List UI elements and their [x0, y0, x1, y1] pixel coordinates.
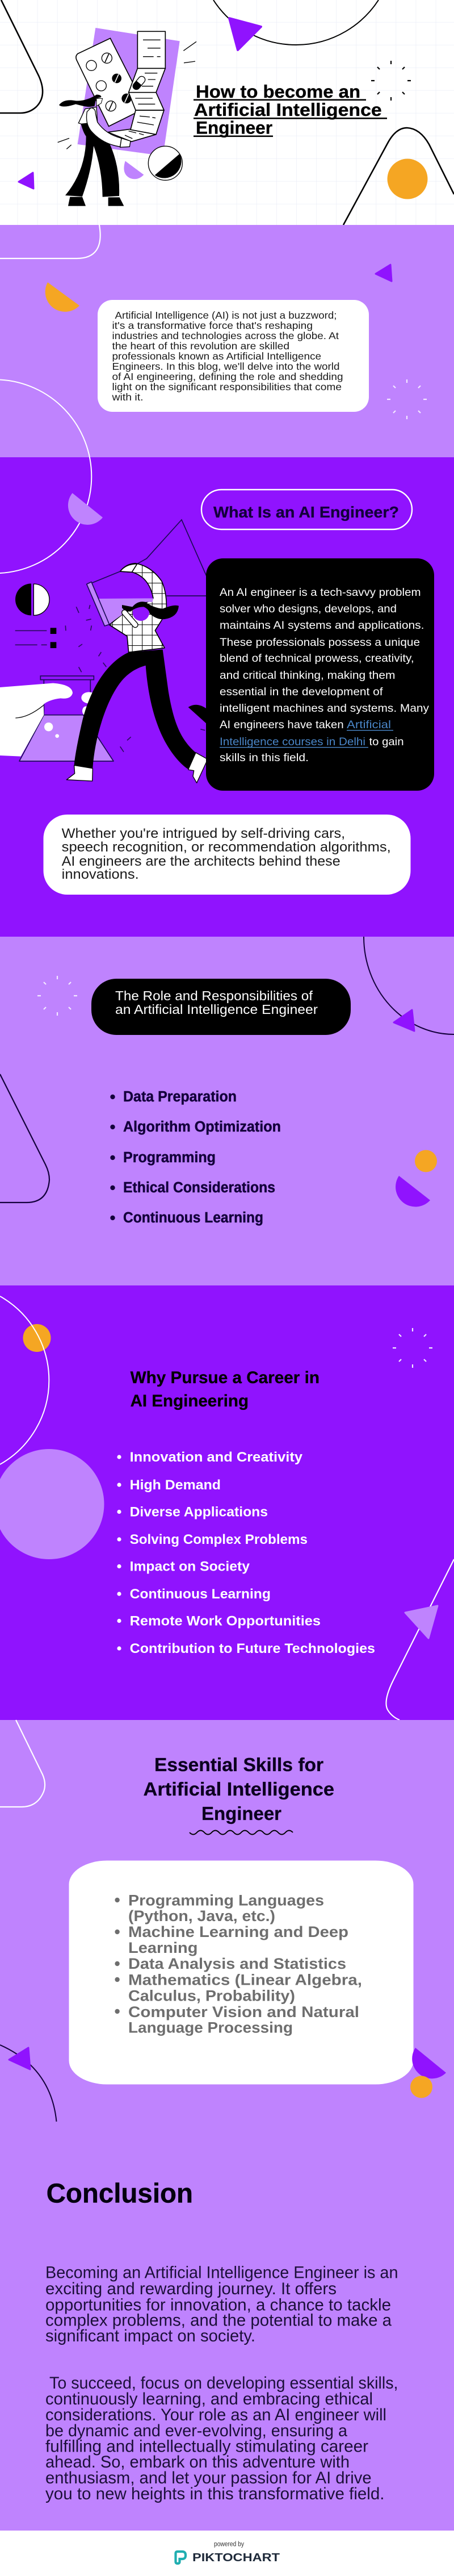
panel: introduction — [0, 225, 454, 457]
text block: black definition card: and critical thinking, making them — [220, 669, 395, 682]
icon: orange circle — [23, 1324, 51, 1352]
text block: paragraph one: opportunities for innovation, a chance to tackle — [45, 2296, 391, 2314]
list: responsibilities — [110, 1089, 281, 1226]
icon: purple triangle — [376, 265, 392, 281]
list: responsibilities: Continuous Learning — [123, 1210, 263, 1226]
list card: skills: Programming Languages — [128, 1892, 324, 1909]
outline: white rounded corner — [0, 225, 100, 258]
icon: purple triangle — [9, 2048, 30, 2069]
icon: small purple triangle — [19, 173, 33, 189]
text block: intro card: Artificial Intelligence (AI) is not just a buzzword; — [115, 310, 337, 321]
icon: purple half circle — [396, 1176, 430, 1206]
list: reasons: High Demand — [130, 1477, 221, 1493]
panel: why pursue a career — [0, 1285, 454, 1720]
text block: intro card: industries and technologies across the globe. At — [112, 330, 339, 341]
text block: white examples card: Whether you're intrigued by self-driving cars, — [62, 826, 345, 841]
icon: lilac circle — [0, 1449, 104, 1559]
list: reasons: Solving Complex Problems — [130, 1532, 308, 1547]
text block: paragraph one: complex problems, and the potential to make a — [45, 2311, 392, 2330]
list: reasons: Diverse Applications — [130, 1504, 268, 1520]
icon: orange circle — [410, 2076, 432, 2098]
icon: orange half circle — [45, 282, 79, 312]
icon: sunburst — [371, 61, 411, 101]
heading: Engineer — [201, 1803, 281, 1824]
list: reasons: Continuous Learning — [130, 1586, 271, 1602]
heading pill — [201, 490, 412, 529]
heading: Artificial Intelligence — [143, 1778, 334, 1800]
outline: white circle arc — [0, 1296, 49, 1464]
text block: black definition card: Intelligence courses in Delhi — [220, 736, 365, 748]
heading — [131, 1368, 320, 1410]
heading — [143, 1754, 334, 1824]
list card: skills: Machine Learning and Deep — [128, 1923, 348, 1940]
text block: paragraph two: continuously learning, and embracing ethical — [45, 2390, 373, 2408]
text block: paragraph two: ahead. So, embark on this adventure with — [45, 2453, 350, 2471]
outline: white circle arc — [0, 379, 91, 573]
icon: white sunburst — [37, 976, 77, 1016]
list card: skills: Language Processing — [128, 2019, 293, 2036]
outline: white rounded line — [386, 1559, 454, 1720]
text block: paragraph one — [45, 2263, 398, 2345]
outline: rounded mountain right — [343, 128, 454, 225]
heading: Conclusion — [47, 2179, 193, 2208]
outline: white rounded triangle — [0, 1720, 45, 1807]
list card: skills: Computer Vision and Natural — [128, 2003, 359, 2020]
outline: circle arc top — [213, 0, 379, 45]
text block: intro card: the heart of this revolution are skilled — [112, 340, 289, 352]
text block: black definition card: Artificial — [347, 719, 391, 731]
decorative wave underline — [190, 1830, 293, 1835]
text block: black definition card — [206, 558, 434, 791]
heading: AI Engineering — [131, 1392, 249, 1410]
panel: what is an AI engineer — [0, 379, 454, 937]
text block: paragraph one: exciting and rewarding journey. It offers — [45, 2279, 337, 2298]
outline: black arc bottom left — [0, 2045, 57, 2122]
list: responsibilities: Programming — [123, 1150, 216, 1166]
panel: essential skills — [0, 1720, 454, 2122]
list: reasons — [117, 1450, 375, 1656]
heading: Why Pursue a Career in — [131, 1368, 320, 1387]
text block: black definition card: blend of technical prowess, creativity, — [220, 652, 414, 665]
icon: orange circle — [387, 159, 428, 199]
list card: skills: Learning — [128, 1939, 197, 1956]
text block: white examples card: AI engineers are the architects behind these — [62, 854, 340, 869]
outline: rounded triangle left — [0, 1074, 49, 1203]
text block: paragraph two: enthusiasm, and let your passion for AI drive — [45, 2469, 372, 2487]
panel: role and responsibilities — [0, 937, 454, 1285]
icon: purple triangle — [394, 1010, 414, 1031]
text block: black definition card: These professionals possess a unique — [220, 636, 420, 649]
text block: black definition card: skills in this field. — [220, 751, 309, 764]
text block: black definition card: essential in the development of — [220, 686, 383, 698]
text block: intro card: professionals known as Artificial Intelligence — [112, 350, 321, 362]
panel: conclusion — [0, 2122, 454, 2531]
icon: purple triangle top — [229, 18, 261, 50]
title: Artificial Intelligence — [194, 99, 382, 120]
icon: white sunburst — [387, 379, 427, 419]
outline: black arc — [364, 937, 454, 1034]
list: reasons: Remote Work Opportunities — [130, 1613, 321, 1629]
icon: Piktochart logo — [176, 2552, 186, 2564]
text block: black definition card: An AI engineer is a tech-savvy problem — [220, 586, 421, 599]
text block: paragraph two — [45, 2374, 398, 2503]
text block: white examples card: speech recognition, or recommendation algorithms, — [62, 840, 391, 855]
text block: black definition card: solver who designs, develops, and — [220, 603, 397, 615]
text block: intro card — [98, 300, 369, 412]
list: responsibilities: Algorithm Optimization — [123, 1119, 281, 1135]
text block: paragraph two: fulfilling and intellectually stimulating career — [45, 2437, 368, 2456]
text block: intro card: with it. — [111, 391, 143, 403]
list: reasons: Contribution to Future Technologies — [130, 1641, 375, 1656]
list card: skills: Mathematics (Linear Algebra, — [128, 1971, 362, 1988]
text block: intro card: it's a transformative force that's reshaping — [112, 320, 313, 331]
outline: rounded triangle left — [0, 0, 43, 113]
text block: intro card: of AI engineering, defining the role and shedding — [112, 371, 343, 382]
icon: white sunburst — [393, 1328, 432, 1368]
list card: skills: (Python, Java, etc.) — [128, 1907, 275, 1924]
text block: paragraph two: considerations. Your role as an AI engineer will — [45, 2406, 386, 2424]
text block: black definition card: to gain — [369, 736, 404, 748]
heading pill: an Artificial Intelligence Engineer — [115, 1002, 318, 1017]
list: reasons: Impact on Society — [130, 1559, 250, 1575]
panel: header — [0, 0, 454, 225]
list: responsibilities: Ethical Considerations — [123, 1180, 275, 1196]
title: How to become an — [196, 81, 360, 102]
title — [194, 81, 387, 137]
text block: intro card: light on the significant responsibilities that come — [112, 381, 342, 393]
icon: lilac half circle — [68, 493, 103, 525]
footer: powered by Piktochart: PIKTOCHART — [192, 2552, 280, 2564]
heading pill — [91, 979, 351, 1035]
text block: paragraph one: Becoming an Artificial Intelligence Engineer is an — [45, 2263, 398, 2282]
list card: skills: Data Analysis and Statistics — [128, 1955, 346, 1972]
text block: white examples card: innovations. — [62, 867, 139, 882]
icon: orange circle — [415, 1150, 437, 1172]
icon: lilac triangle — [405, 1606, 438, 1638]
text block: white examples card — [43, 815, 411, 895]
text block: black definition card: intelligent machines and systems. Many — [220, 702, 429, 715]
icon: purple half circle — [412, 2048, 446, 2078]
text block: paragraph two: To succeed, focus on developing essential skills, — [49, 2374, 398, 2393]
list card: skills — [69, 1861, 413, 2085]
heading pill: The Role and Responsibilities of — [115, 988, 313, 1003]
text block: black definition card: maintains AI systems and applications. — [220, 619, 424, 632]
list card: skills: Calculus, Probability) — [128, 1988, 295, 2005]
footer: powered by Piktochart: powered by — [214, 2541, 244, 2548]
list: responsibilities: Data Preparation — [123, 1089, 237, 1105]
text block: paragraph one: significant impact on society. — [45, 2327, 255, 2345]
heading pill: What Is an AI Engineer? — [213, 503, 399, 521]
footer: powered by Piktochart — [0, 2531, 454, 2576]
text block: black definition card: AI engineers have taken — [220, 719, 344, 731]
illustration: person pouring flask — [0, 520, 208, 783]
text block: paragraph two: be dynamic and ever-evolving, ensuring a — [45, 2421, 348, 2440]
text block: paragraph two: you to new heights in this transformative field. — [45, 2485, 385, 2503]
text block: intro card: Engineers. In this blog, we'll delve into the world — [112, 361, 339, 372]
title: Engineer — [196, 117, 272, 137]
heading: Essential Skills for — [154, 1754, 323, 1775]
list: reasons: Innovation and Creativity — [130, 1450, 302, 1465]
illustration: woman carrying pills and paperwork — [58, 28, 196, 206]
